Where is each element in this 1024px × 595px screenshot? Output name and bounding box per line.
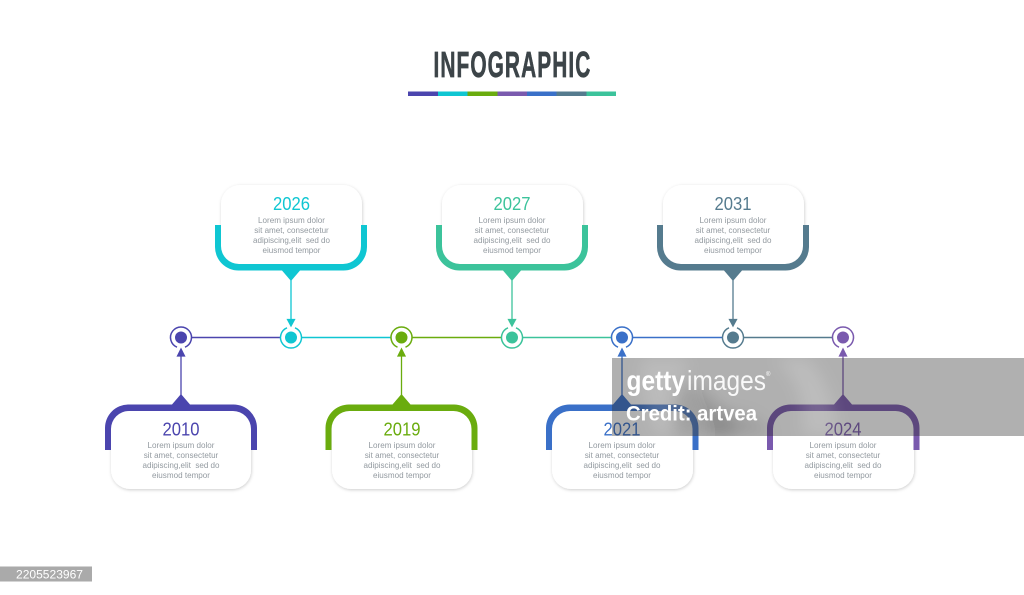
milestone 2010 (105, 327, 257, 489)
card 2027 (436, 185, 588, 281)
card 2031: Lorem ipsum dolor (700, 215, 767, 225)
milestone 2024 (767, 327, 920, 489)
card 2026 (215, 185, 367, 281)
card 2024: eiusmod tempor (814, 470, 872, 480)
watermark band (612, 358, 1024, 436)
watermark logo text (626, 365, 771, 396)
timeline line (181, 336, 843, 338)
image id tag (0, 566, 92, 582)
card 2031: 2031 (714, 194, 752, 214)
connector arrow 2021 (618, 349, 626, 396)
card 2031 (657, 185, 809, 281)
milestone 2019 (326, 327, 478, 489)
card 2019: 2019 (384, 420, 420, 440)
connector arrow 2024 (840, 349, 846, 396)
card 2031: adipiscing,elit sed do (694, 235, 772, 245)
card 2024: sit amet, consectetur (806, 450, 880, 460)
watermark logo text: ® (766, 371, 771, 378)
watermark logo text: images (687, 365, 766, 396)
card 2027: eiusmod tempor (483, 245, 541, 255)
image id tag: 2205523967 (16, 568, 83, 582)
milestone 2027 (436, 185, 588, 348)
card 2024: Lorem ipsum dolor (810, 440, 877, 450)
card 2021: sit amet, consectetur (585, 450, 659, 460)
card 2021: Lorem ipsum dolor (588, 440, 656, 450)
card 2026: 2026 (273, 194, 310, 214)
connector arrow 2019 (398, 349, 405, 396)
card 2019: sit amet, consectetur (365, 450, 439, 460)
node 2027 (502, 328, 522, 348)
card 2026: Lorem ipsum dolor (258, 215, 325, 225)
card 2026: sit amet, consectetur (254, 225, 329, 235)
card 2026: eiusmod tempor (262, 245, 321, 255)
connector arrow 2031 (730, 279, 736, 326)
card 2027: Lorem ipsum dolor (478, 215, 546, 225)
connector arrow 2026 (288, 279, 294, 326)
card 2027: sit amet, consectetur (475, 225, 549, 235)
milestone 2031 (657, 185, 809, 348)
connector arrow 2010 (178, 349, 184, 396)
title colour bar (408, 92, 616, 96)
card 2021: 2021 (604, 420, 640, 440)
card 2019: adipiscing,elit sed do (364, 460, 441, 470)
card 2021 (546, 394, 698, 489)
node 2019 (391, 327, 412, 347)
card 2010 (105, 394, 257, 489)
card 2024 (767, 394, 920, 489)
card 2019: Lorem ipsum dolor (368, 440, 436, 450)
card 2031: eiusmod tempor (704, 245, 762, 255)
watermark credit text: Credit: artvea (626, 402, 757, 426)
card 2021: eiusmod tempor (593, 470, 651, 480)
card 2024: 2024 (824, 420, 862, 440)
node 2021 (612, 327, 632, 347)
card 2021: adipiscing,elit sed do (584, 460, 661, 470)
card 2019 (326, 394, 478, 489)
card 2027: 2027 (494, 194, 530, 214)
milestone 2026 (215, 185, 367, 348)
node 2031 (723, 328, 743, 348)
connector arrow 2027 (508, 279, 516, 326)
card 2024: adipiscing,elit sed do (804, 460, 882, 470)
node 2010 (170, 327, 192, 347)
card 2010: sit amet, consectetur (144, 450, 218, 460)
milestone 2021 (546, 327, 698, 489)
watermark logo text: getty (626, 365, 685, 396)
card 2010: adipiscing,elit sed do (142, 460, 220, 470)
card 2027: adipiscing,elit sed do (474, 235, 551, 245)
title: INFOGRAPHIC (434, 45, 591, 86)
card 2031: sit amet, consectetur (696, 225, 770, 235)
card 2026: adipiscing,elit sed do (253, 235, 330, 245)
node 2026 (280, 328, 302, 348)
card 2010: Lorem ipsum dolor (148, 440, 215, 450)
card 2010: eiusmod tempor (152, 470, 210, 480)
node 2024 (833, 327, 854, 347)
card 2019: eiusmod tempor (373, 470, 431, 480)
card 2010: 2010 (162, 420, 200, 440)
